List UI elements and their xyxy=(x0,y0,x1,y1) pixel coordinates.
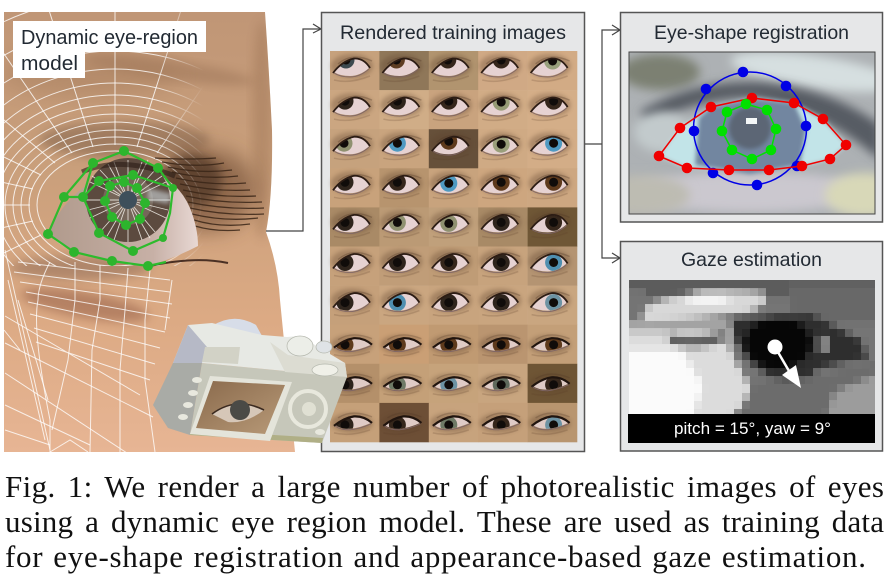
wireframe mesh: upper xyxy=(4,12,202,266)
wireframe mesh: lower xyxy=(4,250,172,455)
arrows: training images to outputs xyxy=(585,25,620,263)
figure caption: using a dynamic eye region model. These are used as training data xyxy=(5,504,884,539)
arrow: model to training images xyxy=(266,24,321,231)
heading: gaze estimation: Gaze estimation xyxy=(681,249,822,271)
row 7 xyxy=(330,286,577,325)
figure caption: Fig. 1: We render a large number of photorealistic images of eyes xyxy=(5,469,884,504)
figure caption xyxy=(5,469,884,574)
caption bar: pitch and yaw: pitch = 15°, yaw = 9° xyxy=(674,420,831,438)
heading: eye-shape registration: Eye-shape registration xyxy=(654,22,849,44)
gaze arrow xyxy=(768,340,801,388)
row 10 xyxy=(330,403,577,442)
heading: rendered training images: Rendered training images xyxy=(340,22,566,44)
eyeball xyxy=(48,158,228,266)
image grid of rendered eyes xyxy=(330,51,577,442)
label: dynamic eye-region model: Dynamic eye-region xyxy=(21,27,198,49)
camera top knobs xyxy=(287,336,338,376)
row 3 xyxy=(330,129,577,169)
panel: eye-shape registration xyxy=(620,12,884,223)
camera dial xyxy=(290,391,326,427)
red eyelid landmarks xyxy=(654,93,851,175)
green pupil landmarks xyxy=(717,99,781,164)
row 9 xyxy=(330,364,577,403)
row 5 xyxy=(330,207,577,247)
icon: camera xyxy=(153,319,347,443)
pixelated grayscale eye image xyxy=(629,280,875,414)
panel: dynamic eye-region model face render xyxy=(4,12,295,452)
camera buttons xyxy=(178,377,325,435)
figure caption: for eye-shape registration and appearance-based gaze estimation. xyxy=(5,539,866,574)
row 1 xyxy=(330,51,577,90)
photo: registered eye xyxy=(630,52,874,214)
panel: gaze estimation xyxy=(620,242,885,451)
green landmark mesh xyxy=(43,146,177,271)
eyelashes xyxy=(155,158,264,230)
camera screen with eye xyxy=(190,376,292,441)
caption bar: pitch and yaw xyxy=(628,414,875,443)
row 4 xyxy=(330,168,577,208)
panel: rendered training images xyxy=(322,12,584,452)
row 2 xyxy=(330,90,577,130)
label: dynamic eye-region model: model xyxy=(21,53,78,75)
label: dynamic eye-region model xyxy=(13,21,206,78)
row 8 xyxy=(330,325,577,364)
blue limbus landmarks xyxy=(689,67,811,190)
row 6 xyxy=(330,246,577,286)
